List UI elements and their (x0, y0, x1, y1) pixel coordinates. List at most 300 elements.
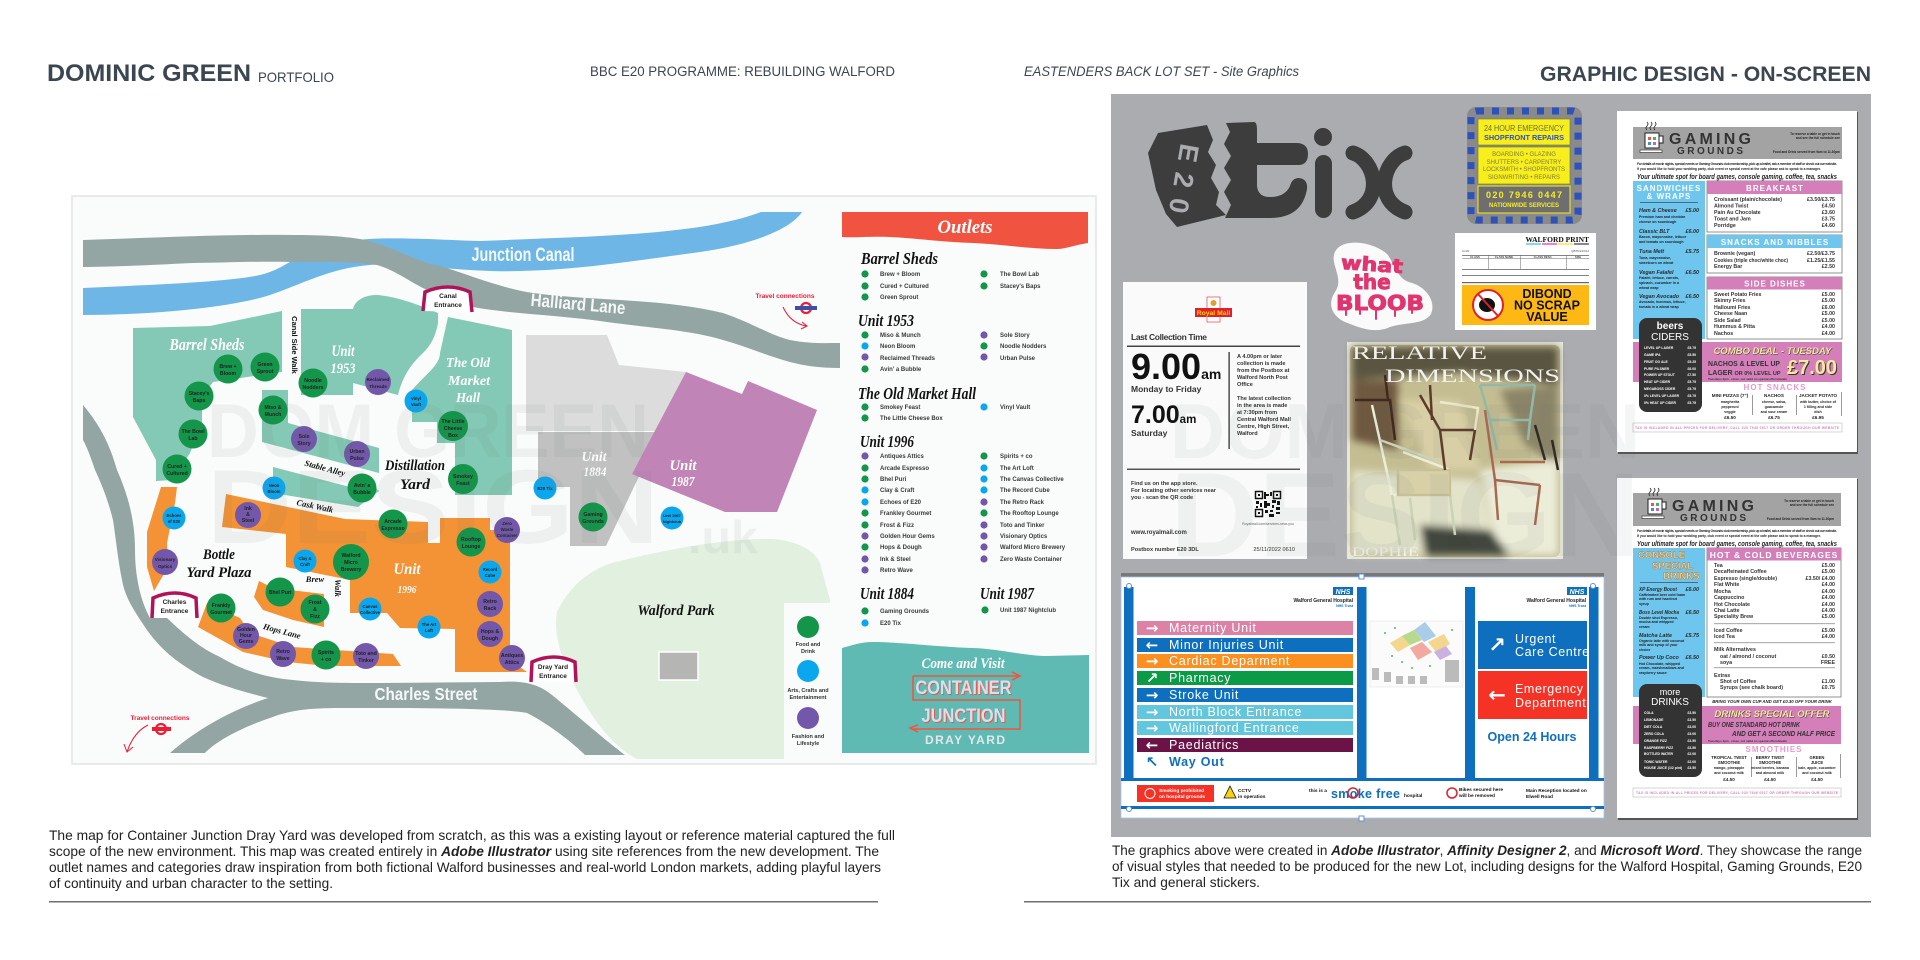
marker: Antiques Attics (499, 645, 525, 671)
marker: Retro Wave (270, 641, 296, 667)
marker: Gaming Grounds: Gaming (583, 512, 603, 518)
marker: Visionary Optics: Optics (158, 564, 173, 569)
hot snacks: HOT SNACKS (1744, 383, 1806, 392)
Dray Yard Entrance arch: Dray Yard (538, 664, 568, 671)
map description text: of continuity and urban character to the setting. (49, 875, 333, 891)
more drinks panel: £2.00 (1688, 752, 1696, 756)
Come and Visit panel: Come and Visit (922, 656, 1005, 672)
beers and ciders panel: FRUIT OO ALE (1644, 360, 1669, 364)
marker: Cured + Cultured: Cured + (167, 464, 187, 470)
The Old Market Hall: The Old (446, 356, 491, 371)
outlets list: Unit 1996: Visionary Optics (1000, 534, 1048, 540)
marker: Vinyl Vault (404, 390, 428, 412)
Unit 1987 (632, 372, 817, 512)
travel connections bottom left: Travel connections (131, 715, 190, 722)
marker: The Bowl Lab: The Bowl (181, 429, 205, 435)
snacks and nibbles box: £2.50 (1822, 264, 1835, 270)
map description text: The map for Container Junction Dray Yard was developed from scratch, as this was a existing layout or reference material captured the full (49, 827, 895, 843)
menu header with mug icon: and see the full schedule see (1796, 136, 1840, 140)
console special drinks column: Matcha Latte (1639, 633, 1672, 639)
outlets list: The Old Market Hall (858, 384, 1030, 422)
hot and cold beverages box: HOT & COLD BEVERAGES (1710, 550, 1838, 560)
smoothies: JUICE (1811, 760, 1823, 765)
sandwiches column: Avocado, hummus, lettuce, (1639, 300, 1686, 304)
walkway labels: Cask Walk (296, 497, 335, 515)
side dishes box: £4.00 (1822, 324, 1835, 330)
breakfast box: £4.50 (1822, 204, 1835, 210)
marker: Arcade Espresso (378, 510, 408, 538)
Royal Mail collection plate: For locating other services near (1131, 488, 1217, 494)
drinks menu footer (1633, 788, 1841, 797)
hot and cold beverages box: Decaffeinated Coffee (1714, 569, 1767, 575)
Royal Mail collection plate: Office (1237, 382, 1253, 388)
notices strip: Main Reception located on (1526, 788, 1587, 794)
map description text: scope of the new environment. This map was created entirely in Adobe Illustrator using site references from the new development. The (49, 843, 879, 859)
Come and Visit panel: CONTAINER (916, 678, 1012, 699)
Barrel Sheds unit: Barrel Sheds (169, 335, 245, 354)
Distillation Yard label: Distillation (384, 458, 445, 474)
Charles Street road (83, 405, 625, 755)
breakfast box: £3.60 (1822, 210, 1835, 216)
marker: Frost & Fizz (300, 594, 330, 624)
map watermark: .uk (688, 511, 758, 563)
more drinks panel: £3.50 (1688, 746, 1696, 750)
notices strip: in operation (1238, 794, 1266, 800)
hot and cold beverages box: Tea (1714, 563, 1723, 569)
Walford Print scrap notice (1455, 233, 1596, 330)
smoothies (1711, 745, 1841, 782)
panel: on-screen graphics (1111, 94, 1871, 837)
Royal Mail collection plate: you - scan the QR code (1131, 495, 1193, 501)
console special drinks column: Double shot Espresso, (1639, 616, 1678, 620)
marker: Walford Micro Brewery: Brewery (341, 567, 361, 573)
side dishes box: Cheese Naan (1714, 311, 1747, 317)
graphics watermark: DESIGN (1170, 448, 1640, 582)
hot snacks: dish (1814, 410, 1822, 414)
marker: Stacey's Baps: Stacey's (189, 391, 210, 397)
marker: Frost & Fizz: Fizz (310, 614, 320, 620)
marker: Antiques Attics: Attics (505, 660, 519, 666)
outlets list: Unit 1996: Spirits + co (1000, 454, 1033, 460)
Unit 1953: 1953 (330, 361, 356, 377)
Gaming Grounds drinks menu: Your ultimate spot for board games, console gaming, coffee, tea, snacks (1637, 539, 1837, 548)
marker: Miso & Munch: Munch (265, 412, 281, 418)
marker: Sole Story: Story (297, 441, 311, 447)
Royal Mail collection plate: in the area is made (1237, 403, 1287, 409)
hot and cold beverages box: Syrups (see chalk board) (1720, 685, 1783, 691)
marker: Spirits + co: Spirits (318, 650, 334, 656)
Walford Print scrap notice: NO SCRAP (1514, 298, 1580, 312)
more drinks panel: HOUSE JUICE (1/2 pint) (1644, 766, 1682, 770)
Royal Mail collection plate: Central Walford Mall (1237, 417, 1291, 423)
Royal Mail collection plate (1123, 282, 1307, 559)
Unit 1953: Unit (332, 343, 355, 360)
outlets list: Unit 1953: Avin' a Bubble (880, 367, 922, 373)
breakfast box: Toast and Jam (1714, 216, 1751, 222)
sandwiches column: wheat wrap (1638, 286, 1659, 290)
marker: Record Cube: Cube (485, 573, 496, 578)
sandwiches column: £5.00 (1684, 208, 1699, 214)
beers and ciders panel: £5.25 (1688, 360, 1696, 364)
notices strip: hospital (1404, 793, 1422, 799)
Stable strips (262, 390, 379, 507)
directional sign rows: ↗ (1146, 669, 1158, 687)
shopfront repairs sticker (1467, 107, 1582, 224)
marker: Reclaimed Threads: Reclaimed (367, 377, 390, 382)
Urgent Care Centre sign: ↗ (1488, 633, 1506, 657)
beers and ciders panel: 0% LEVEL UP LAGER (1644, 394, 1680, 398)
snacks and nibbles box: £1.25/£1.55 (1807, 258, 1835, 264)
hot and cold beverages box: soya (1720, 660, 1732, 666)
Walford Park (556, 539, 830, 759)
menu header with mug icon: To reserve a table or get in touch (1790, 132, 1840, 136)
marker: Noodle Nodders: Nodders (302, 385, 324, 391)
console special drinks column: £5.75 (1684, 633, 1700, 639)
marker: The Little Cheese Box: The Little (441, 419, 465, 425)
sandwiches column: Premium ham and cheddar (1639, 215, 1686, 219)
walkway labels: Canal Side Walk (290, 316, 299, 375)
more drinks panel: £3.50 (1688, 739, 1696, 743)
Dray Yard Entrance arch: Entrance (539, 673, 567, 680)
beers and ciders panel: £5.75 (1688, 394, 1696, 398)
hot and cold beverages box: £4.00 (1822, 589, 1835, 595)
hot and cold beverages box: £5.00 (1822, 569, 1835, 575)
sandwiches column: Vegan Falafel (1639, 270, 1674, 276)
directional sign rows: → (1146, 619, 1158, 637)
hot and cold beverages box: FREE (1821, 660, 1835, 666)
Halliard Lane road (83, 235, 840, 368)
more drinks panel: £3.50 (1688, 718, 1696, 722)
Walford Print scrap notice: QBT6/24/012 (1571, 249, 1589, 253)
side dishes box: Nachos (1714, 331, 1733, 337)
snacks and nibbles box (1707, 235, 1842, 273)
notices strip: smoke free (1331, 787, 1400, 801)
Unit 1996 and orange yards: Unit (394, 561, 421, 578)
Gaming Grounds food menu (1617, 111, 1858, 454)
more drinks panel: DIET COLA (1644, 725, 1663, 729)
snacks and nibbles box: Energy Bar (1714, 264, 1742, 270)
beers and ciders panel: £5.75 (1688, 387, 1696, 391)
marker: Zero Waste Container: Container (497, 533, 518, 538)
Walford Park: Walford Park (638, 603, 715, 619)
marker: Green Sprout: Green (258, 362, 272, 368)
hot and cold beverages box: £4.00 (1822, 608, 1835, 614)
drinks menu header with mug icon: Food and Drink served from 9am to 11.30pm (1767, 517, 1834, 521)
marker: Golden Hour Gems: Golden (237, 627, 255, 633)
marker: Vinyl Vault: Vinyl (411, 396, 421, 401)
hot and cold beverages box: Speciality Brew (1714, 614, 1754, 620)
hospital site map (1370, 621, 1463, 687)
marker: Record Cube (478, 560, 502, 584)
hot and cold beverages box: Mocha (1714, 589, 1731, 595)
marker: Clay & Craft (294, 550, 316, 572)
hot snacks: with butter, choice of (1799, 400, 1837, 404)
Distillation Yard label: Yard (400, 477, 431, 493)
Royal Mail collection plate: Monday to Friday (1131, 384, 1202, 394)
shopfront repairs sticker: 24 HOUR EMERGENCY (1484, 124, 1564, 133)
outlets list: Unit 1996: Retro Wave (880, 568, 913, 574)
marker: Gaming Grounds: Grounds (582, 519, 604, 525)
beers and ciders panel: MEGABOSS CIDER (1644, 387, 1676, 391)
sandwiches column: £6.50 (1684, 270, 1699, 276)
hot and cold beverages box: Extras (1714, 673, 1730, 679)
marker: The Art Loft: Loft (425, 628, 434, 633)
hot and cold beverages box: Flat White (1714, 582, 1739, 588)
Emergency Department sign (1478, 671, 1587, 719)
Royal Mail collection plate: A 4.00pm or later (1237, 354, 1283, 360)
What the Bloob sticker: what (1340, 252, 1404, 278)
side dishes box: Halloumi Fries (1714, 305, 1751, 311)
combo deal banner: £7.00 (1788, 358, 1838, 380)
The Old Market Hall: Market (447, 374, 491, 389)
sandwiches column: Bacon, mayonnaise, lettuce (1639, 235, 1686, 239)
Dray Yard Entrance arch (531, 657, 576, 682)
more drinks panel: £3.50 (1688, 711, 1696, 715)
console special drinks column: choice (1639, 648, 1650, 652)
Come and Visit panel: JUNCTION (922, 707, 1006, 728)
marker: Antiques Attics: Antiques (501, 653, 523, 659)
outlets list: Unit 1953: Sole Story (1000, 333, 1030, 339)
selection handles (1126, 574, 1596, 821)
Gaming Grounds food menu: If you would like to hold your wedding party, club event or special event at the cafe please ask to speak to a manager. (1637, 167, 1821, 171)
outlets list: Barrel Sheds: Stacey's Baps (1000, 284, 1041, 290)
header: portfolio name: DOMINIC GREEN (47, 60, 251, 87)
marker: Frankly Gourmet: Gourmet (210, 610, 232, 616)
beers and ciders panel: £6.00 (1688, 367, 1696, 371)
Charles Entrance arch: Charles (163, 599, 187, 606)
NHS logo left: NHS Trust (1336, 604, 1354, 608)
shopfront repairs sticker: SIGNWRITING • REPAIRS (1488, 175, 1560, 181)
Royal Mail collection plate: from the Postbox at (1237, 368, 1290, 374)
marker: Walford Micro Brewery (333, 544, 369, 580)
Urgent Care Centre sign (1478, 621, 1590, 669)
hot snacks: £6.75 (1768, 415, 1780, 420)
map description text (49, 827, 895, 891)
marker: Hops & Dough (477, 621, 503, 647)
outlets list: Unit 1884 and 1987: Unit 1987 (980, 584, 1035, 603)
outlets list: Unit 1884 and 1987: Unit 1987 Nightclub (1000, 608, 1056, 614)
Royal Mail collection plate: www.royalmail.com (1130, 530, 1187, 536)
What the Bloob sticker: the (1353, 270, 1391, 294)
marker: E20 Tix (534, 476, 556, 500)
marker: Echoes of E20 (162, 506, 186, 530)
directional sign rows: → (1146, 686, 1158, 704)
marker: Neon Bloom: Bloom (267, 489, 281, 494)
marker: Golden Hour Gems: Hour (240, 633, 252, 639)
marker: Stacey's Baps: Baps (193, 398, 205, 404)
outlets list: Unit 1953: Miso & Munch (880, 333, 921, 339)
travel connections top right: Travel connections (756, 293, 815, 300)
outlets list: The Old Market Hall: Smokey Feast (880, 405, 920, 411)
sandwiches column: SANDWICHES (1637, 184, 1701, 193)
more drinks panel: £3.00 (1688, 725, 1696, 729)
snacks and nibbles box: Cookies (triple choc/white choc) (1714, 258, 1788, 264)
Unit 1884 (526, 335, 686, 546)
console special drinks column: raspberry sauce (1639, 671, 1667, 675)
directional sign rows: Cardiac Deparment (1169, 654, 1290, 668)
Royal Mail collection plate: 25/11/2022 0610 (1253, 547, 1295, 553)
What the Bloob sticker: BLOOB (1336, 291, 1424, 315)
Royal Mail collection plate: The latest collection (1237, 396, 1291, 402)
more drinks panel: BOTTLED WATER (1644, 752, 1673, 756)
Urgent Care Centre sign: Care Centre (1515, 645, 1590, 659)
hot snacks: JACKET POTATO (1799, 393, 1837, 398)
graphics watermark (1170, 387, 1640, 582)
Emergency Department sign: Department (1515, 696, 1586, 710)
marker: Smokey Feast: Feast (456, 481, 470, 487)
walkway labels (261, 316, 347, 641)
directional sign rows: Wallingford Entrance (1169, 721, 1300, 735)
sandwiches column: sweetcorn on wheat (1639, 261, 1674, 265)
hot snacks: cheese, salsa, (1762, 400, 1786, 404)
outlets list: Unit 1996: Clay & Craft (880, 488, 914, 494)
outlets list: Unit 1884 and 1987: E20 Tix (880, 621, 902, 627)
The Old Market Hall: Hall (455, 391, 480, 406)
smoothies: GREEN (1810, 755, 1824, 760)
menu footer: TAX IS INCLUDED IN ALL PRICES FOR DELIVERY, CALL 020 7946 0517 OR ORDER THROUGH OUR WEBSITE (1635, 426, 1840, 430)
more drinks panel: ZERO COLA (1644, 732, 1665, 736)
marker: Rooftop Lounge: Rooftop (461, 537, 481, 543)
Urgent Care Centre sign: Urgent (1515, 632, 1556, 646)
beers and ciders panel: GAME IPA (1644, 353, 1661, 357)
marker: Clay & Craft: Craft (300, 562, 310, 567)
outlets list: Unit 1996: The Canvas Collective (1000, 477, 1064, 483)
console special drinks column: mocha and whipped (1639, 620, 1674, 624)
marker: Retro Wave: Wave (276, 656, 290, 662)
Royal Mail collection plate: Postbox number E20 3DL (1131, 547, 1199, 553)
hot and cold beverages box: Iced Tea (1714, 634, 1735, 640)
outlets list: Unit 1996: Echoes of E20 (880, 500, 922, 506)
marker: Toto and Tinker: Toto and (355, 651, 377, 657)
marker: The Little Cheese Box: Box (448, 433, 458, 439)
marker: Ink & Steel (235, 502, 261, 528)
Halliard Lane road: Halliard Lane (530, 290, 626, 318)
hot snacks: 1 filling and side (1804, 405, 1832, 409)
Royal Mail collection plate: Saturday (1131, 428, 1168, 438)
marker: Walford Micro Brewery: Walford (341, 553, 361, 559)
breakfast box: Pain Au Chocolate (1714, 210, 1761, 216)
Walford Print scrap notice: VALUE (1526, 310, 1568, 324)
The Old Market Hall (412, 317, 512, 495)
console special drinks column: cream (1639, 625, 1650, 629)
marker: Ink & Steel: Ink (244, 506, 252, 512)
marker: Bhel Puri: Bhel Puri (269, 590, 292, 596)
combo deal banner: LAGER OR 0% LEVEL UP (1708, 370, 1781, 377)
NHS logo right: NHS Trust (1569, 604, 1587, 608)
outlets list: Barrel Sheds: Barrel Sheds (860, 249, 938, 268)
beers and ciders panel: £5.75 (1688, 380, 1696, 384)
Open 24 Hours: Open 24 Hours (1488, 730, 1576, 744)
marker: Smokey Feast (448, 464, 478, 494)
combo deal banner: £7.00 (1787, 357, 1837, 379)
marker: Brew + Bloom: Brew + (219, 364, 237, 370)
directional sign rows: Minor Injuries Unit (1169, 638, 1284, 652)
breakfast box: BREAKFAST (1746, 184, 1804, 193)
marker: Frankly Gourmet (206, 594, 236, 622)
breakfast box: £3.50/£3.75 (1807, 197, 1835, 203)
hot and cold beverages box: £4.00 (1822, 602, 1835, 608)
smoothies: SMOOTHIE (1759, 760, 1781, 765)
console special drinks column: milk and syrup of your (1639, 643, 1678, 647)
console special drinks column: XP Energy Boost (1638, 587, 1677, 593)
more drinks panel: DRINKS (1651, 697, 1689, 708)
map description text: outlet names and categories draw inspiration from both fictional Walford businesses and real-world London markets, adding playful layers (49, 859, 881, 875)
outlets list: Unit 1996 (860, 432, 1066, 574)
side dishes box: SIDE DISHES (1744, 280, 1806, 288)
marker: Noodle Nodders: Noodle (304, 378, 322, 384)
marker: Stacey's Baps (184, 382, 214, 410)
travel connections top right (756, 293, 817, 329)
sandwiches column: and tomato on sourdough (1639, 240, 1684, 244)
marker: Clay & Craft: Clay & (298, 556, 312, 561)
marker: Green Sprout (250, 352, 280, 382)
drinks menu footer: TAX IS INCLUDED IN ALL PRICES FOR DELIVERY, CALL 020 7946 0517 OR ORDER THROUGH OUR WEBSITE (1636, 791, 1839, 795)
more drinks panel: COLA (1644, 711, 1654, 715)
shopfront repairs sticker: NATIONWIDE SERVICES (1489, 203, 1559, 209)
hot snacks: NACHOS (1764, 393, 1784, 398)
map legend: Lifestyle (797, 741, 819, 747)
marker: Hops & Dough: Dough (482, 636, 498, 642)
Unit 1953 (301, 295, 438, 395)
outlets list: Unit 1953: Reclaimed Threads (880, 356, 936, 362)
outlets list: Barrel Sheds (860, 249, 1041, 301)
notices strip: on hospital grounds (1159, 794, 1205, 800)
Relative Dimensions album photo: RELATIVE (1352, 344, 1487, 364)
Junction Canal waterway (83, 212, 802, 315)
marker: Smokey Feast: Smokey (453, 474, 473, 480)
outlets list: Unit 1996: Hops & Dough (880, 545, 922, 551)
breakfast box: Almond Twist (1714, 204, 1749, 210)
What the Bloob sticker (1331, 243, 1432, 330)
marker: Gaming Grounds (578, 502, 608, 532)
Distillation Yard label (384, 458, 445, 493)
walkway labels: Brew (305, 574, 325, 584)
marker: Echoes of E20: Echoes (167, 513, 182, 518)
side dishes box: £6.00 (1822, 305, 1835, 311)
outlets list: Unit 1953: Neon Bloom (880, 344, 915, 350)
directional sign rows: → (1146, 719, 1158, 737)
NHS logo right (1526, 587, 1587, 608)
marker: The Little Cheese Box (438, 411, 468, 441)
hot and cold beverages box: £5.00 (1822, 563, 1835, 569)
marker: Brew + Bloom: Bloom (220, 371, 236, 377)
beers and ciders panel: HEAT UP CIDER (1644, 380, 1671, 384)
hot and cold beverages box: £0.75 (1822, 685, 1835, 691)
Gaming Grounds food menu: Your ultimate spot for board games, console gaming, coffee, tea, snacks (1637, 172, 1837, 181)
drinks special offer banner (1633, 706, 1841, 744)
outlets header (842, 212, 1088, 249)
console special drinks column: DRINKS (1663, 571, 1699, 582)
marker: Cured + Cultured (162, 454, 192, 484)
walkway labels: Stable Alley (304, 458, 347, 478)
Royal Mail collection plate: Walford North Post (1237, 375, 1288, 381)
marker: Echoes of E20: of E20 (168, 519, 181, 524)
Unit 1884: Unit (582, 450, 608, 465)
drinks menu header with mug icon (1633, 488, 1841, 526)
outlets list: Unit 1996: The Record Cube (1000, 488, 1050, 494)
directional sign rows: ← (1146, 736, 1158, 754)
outlets list: Unit 1996: The Rooftop Lounge (1000, 511, 1059, 517)
beers and ciders panel: PURE PILSNER (1644, 367, 1670, 371)
travel connections bottom left (124, 715, 190, 752)
more drinks panel: ORANGE FIZZ (1644, 739, 1667, 743)
beers and ciders panel: £5.50 (1688, 353, 1696, 357)
sandwiches column: £6.00 (1684, 229, 1699, 235)
combo deal banner: Tuesdays 4pm - close, not valid on special offers/meals (1708, 377, 1787, 381)
drinks menu header with mug icon: GAMING (1672, 498, 1754, 515)
Royal Mail collection plate: Royal Mail (1197, 310, 1230, 317)
marker: Ink & Steel: Steel (242, 518, 255, 524)
